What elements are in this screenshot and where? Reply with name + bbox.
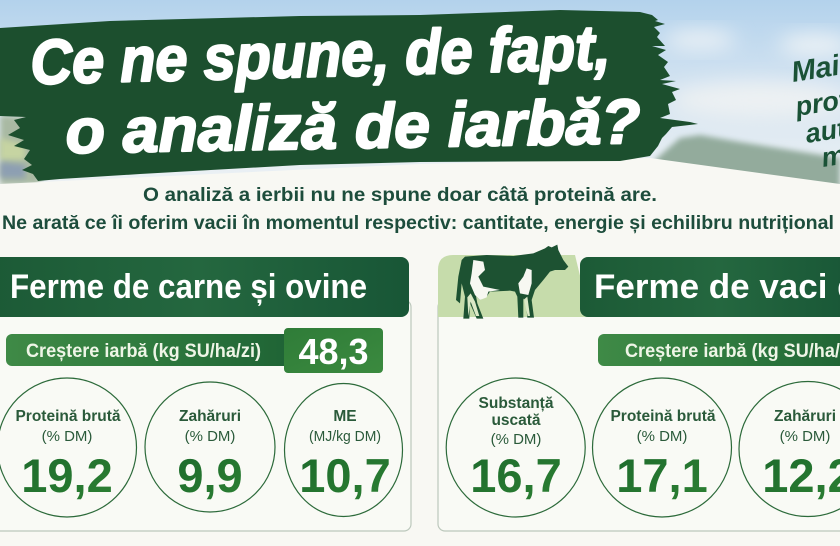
title — [30, 13, 641, 167]
metric: dry matter: uscată — [491, 412, 541, 429]
growth bar — [6, 334, 291, 366]
metric: crude protein: 19,2 — [21, 449, 113, 502]
metric: metabolisable energy: 10,7 — [299, 449, 391, 502]
side note handwritten — [789, 36, 840, 173]
panel: dairy farms — [438, 245, 840, 531]
intro text: O analiză a ierbii nu ne spune doar câtă proteină are. — [143, 185, 657, 206]
metric: sugars: (% DM) — [780, 428, 830, 445]
metric: dry matter — [446, 378, 585, 517]
metric: sugars: Zahăruri — [774, 408, 836, 425]
metric: crude protein: Proteină brută — [610, 408, 716, 425]
light green tab — [438, 255, 590, 317]
icon: cow — [456, 245, 568, 319]
metric: sugars: Zahăruri — [179, 408, 241, 425]
metric: sugars — [739, 382, 840, 516]
title brush stroke — [0, 10, 698, 181]
metric: metabolisable energy: ME — [333, 408, 357, 425]
panel heading: Ferme de carne și ovine — [10, 268, 367, 306]
growth value — [284, 328, 383, 373]
panel card — [0, 300, 411, 531]
metric: dry matter: (% DM) — [491, 431, 541, 448]
metric: sugars: (% DM) — [185, 428, 235, 445]
metric: sugars: 9,9 — [177, 449, 243, 502]
background: cream page area — [0, 158, 840, 546]
growth value: 48,3 — [298, 331, 369, 372]
metric: crude protein: (% DM) — [42, 428, 92, 445]
panel: beef and sheep farms — [0, 257, 411, 531]
metric: dry matter: 16,7 — [470, 449, 562, 502]
intro text: Ne arată ce îi oferim vacii în momentul respectiv: cantitate, energie și echilibru nutrițional — [2, 213, 834, 234]
metric: crude protein: 17,1 — [616, 449, 708, 502]
panel heading — [580, 257, 840, 317]
background: sky and hills — [0, 0, 840, 190]
metric: sugars — [145, 382, 275, 512]
growth bar — [598, 334, 840, 366]
metric: crude protein: Proteină brută — [15, 408, 121, 425]
metric: crude protein — [0, 378, 136, 517]
panel card — [438, 300, 840, 531]
title: o analiză de iarbă? — [65, 87, 641, 167]
metric: crude protein: (% DM) — [637, 428, 687, 445]
title: Ce ne spune, de fapt, — [30, 13, 611, 98]
intro text — [2, 185, 834, 234]
metric: dry matter: Substanță — [479, 395, 554, 412]
metric: metabolisable energy — [284, 384, 402, 516]
metric: metabolisable energy: (MJ/kg DM) — [309, 428, 381, 445]
growth bar: Creștere iarbă (kg SU/ha/zi) — [26, 341, 261, 362]
metric: crude protein — [592, 378, 732, 517]
panel heading — [0, 257, 409, 317]
